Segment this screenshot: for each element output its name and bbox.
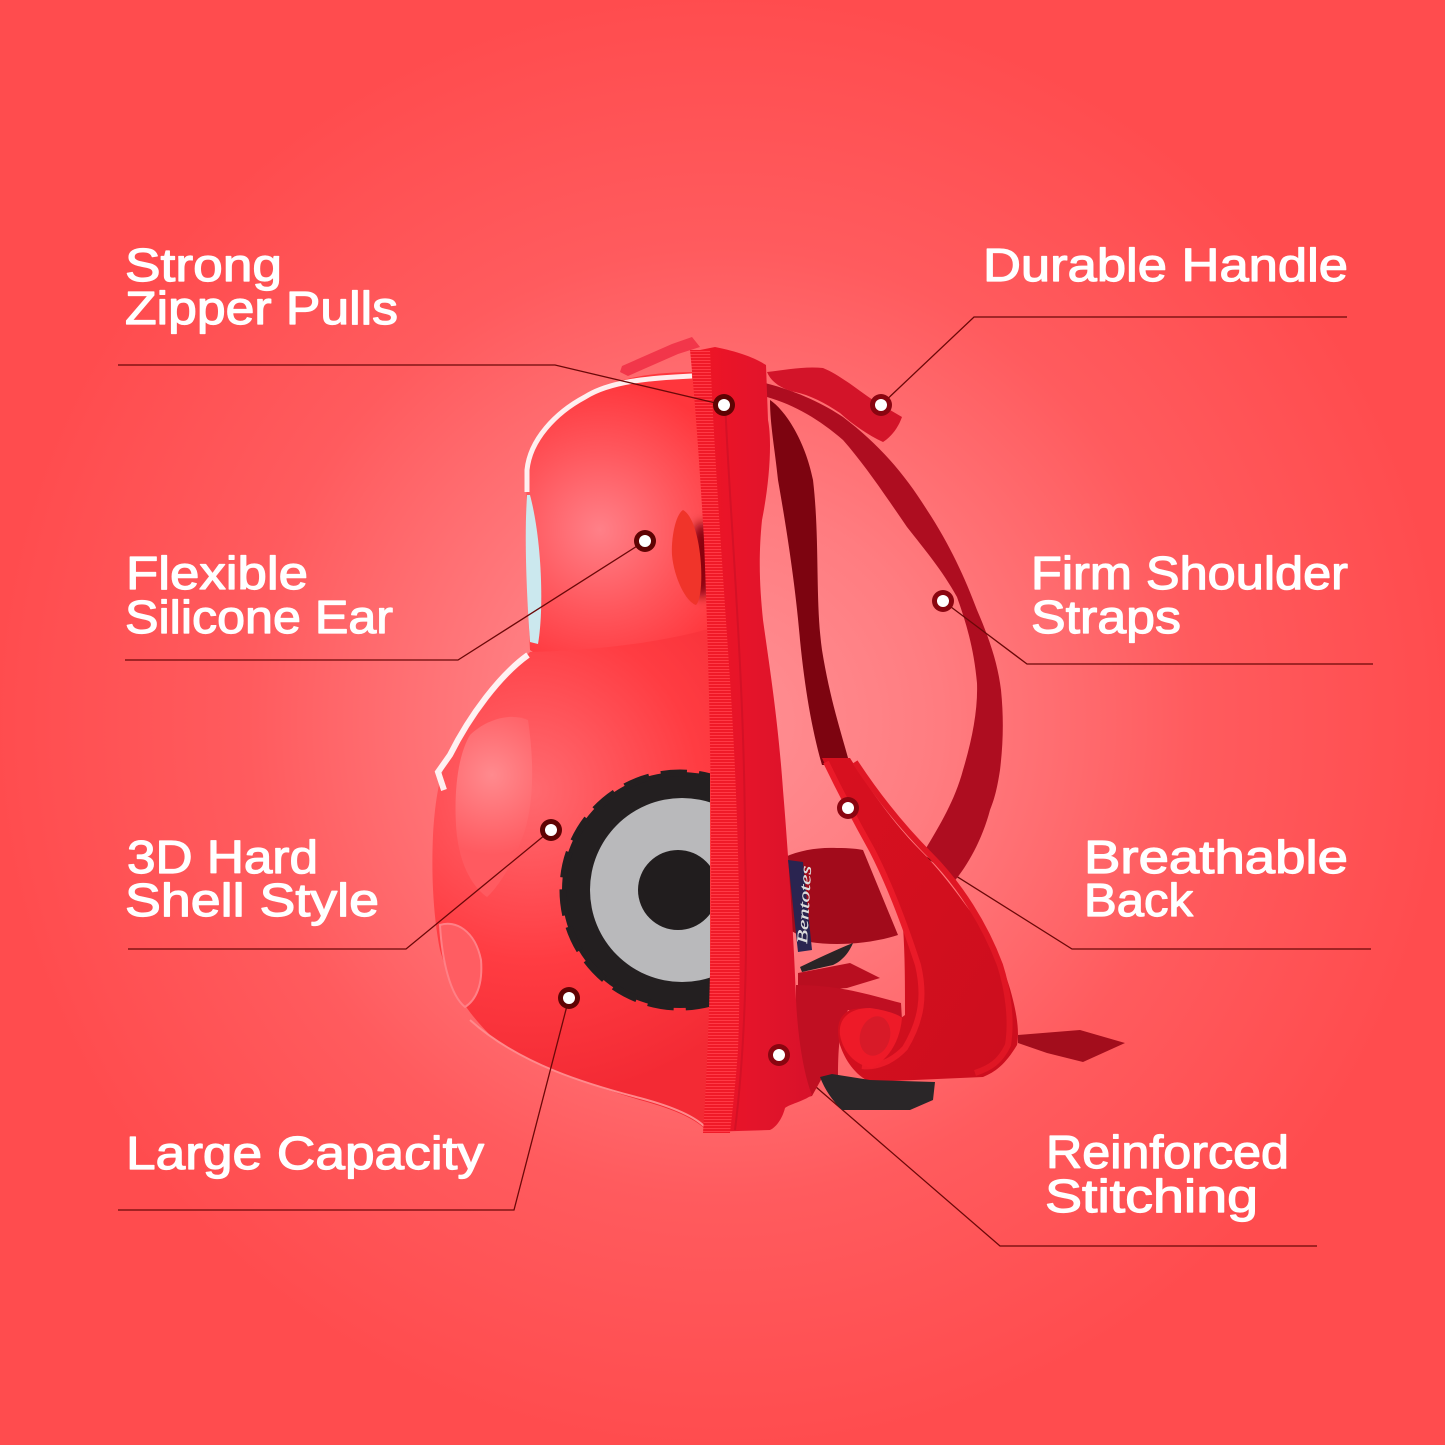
- label: Breathable Back: Breathable: [1084, 831, 1348, 883]
- marker dot: zipper: [713, 394, 735, 416]
- label: Breathable Back: Back: [1084, 874, 1194, 926]
- inner dark strap: [770, 400, 850, 765]
- label: Flexible Silicone Ear: [125, 547, 393, 643]
- leader line: Flexible Silicone Ear: [125, 541, 645, 660]
- ear shadow: [690, 522, 714, 598]
- shell white rim: [527, 376, 692, 492]
- leader line: Strong Zipper Pulls: [118, 365, 724, 405]
- label: Durable Handle: Durable Handle: [983, 239, 1348, 291]
- label: Reinforced Stitching: Reinforced: [1046, 1126, 1289, 1178]
- body lens bump: [456, 717, 532, 897]
- label: Flexible Silicone Ear: Flexible: [126, 547, 308, 599]
- marker dot: handle: [870, 394, 892, 416]
- marker dot: back: [837, 797, 859, 819]
- pad inner rim: [826, 762, 922, 1066]
- label: 3D Hard Shell Style: 3D Hard: [127, 831, 318, 883]
- lower webbing flaps: [798, 963, 880, 992]
- label: 3D Hard Shell Style: [125, 831, 379, 926]
- shoulder pad: [822, 758, 1018, 1082]
- zipper seam: [725, 400, 746, 1130]
- label: Breathable Back: [1084, 831, 1348, 926]
- marker dot: shell: [540, 819, 562, 841]
- label: Reinforced Stitching: [1045, 1126, 1289, 1222]
- ear: [672, 510, 701, 605]
- leader line: Breathable Back: [848, 808, 1371, 949]
- ear silicone: [672, 510, 714, 605]
- marker dot: ear: [634, 530, 656, 552]
- rear shoulder strap: [765, 383, 1003, 883]
- tag background: [788, 860, 812, 952]
- pad curl: [840, 1008, 902, 1068]
- label: Firm Shoulder Straps: Straps: [1031, 591, 1181, 643]
- zipper puller: [620, 337, 700, 376]
- buckle: [820, 1074, 935, 1110]
- leader line: Reinforced Stitching: [779, 1055, 1317, 1246]
- brand tag: [788, 860, 815, 952]
- zipper: [690, 350, 740, 1133]
- backpack illustration: [432, 337, 1125, 1133]
- label: Firm Shoulder Straps: [1031, 547, 1348, 643]
- leader line: Large Capacity: [118, 998, 569, 1210]
- carry handle: [767, 367, 902, 442]
- grey disc: [590, 798, 710, 982]
- blue side strip: [526, 495, 541, 644]
- tyre: [562, 772, 710, 1008]
- leader line: Durable Handle: [881, 317, 1347, 405]
- wheel: [560, 770, 710, 1010]
- label: 3D Hard Shell Style: Shell Style: [125, 874, 379, 926]
- black clip under panel: [800, 943, 853, 972]
- lower detail bump: [440, 924, 481, 1007]
- label: Flexible Silicone Ear: Silicone Ear: [125, 591, 393, 643]
- leader line: 3D Hard Shell Style: [128, 830, 551, 949]
- marker dot: straps: [932, 590, 954, 612]
- label: Strong Zipper Pulls: Strong: [125, 239, 282, 291]
- label: Strong Zipper Pulls: Zipper Pulls: [125, 282, 398, 334]
- tyre lugs: [560, 770, 710, 1010]
- label: Reinforced Stitching: Stitching: [1045, 1170, 1258, 1222]
- tag text: Bentotes: [795, 865, 815, 944]
- shell head: [526, 372, 710, 700]
- strap tail: [1018, 1030, 1125, 1062]
- back padding panel: [785, 848, 898, 944]
- shell body: [432, 628, 713, 1130]
- label: Large Capacity: Large Capacity: [126, 1127, 484, 1179]
- curl mesh: [855, 1013, 895, 1059]
- body white rim: [438, 655, 528, 790]
- label: Strong Zipper Pulls: [125, 239, 398, 334]
- shell bottom highlight: [470, 1020, 706, 1128]
- marker dot: capacity: [558, 987, 580, 1009]
- hub: [638, 850, 718, 930]
- leader line: Firm Shoulder Straps: [943, 601, 1373, 664]
- marker dot: stitching: [768, 1044, 790, 1066]
- fabric side panel: [695, 347, 812, 1132]
- label: Firm Shoulder Straps: Firm Shoulder: [1031, 547, 1348, 599]
